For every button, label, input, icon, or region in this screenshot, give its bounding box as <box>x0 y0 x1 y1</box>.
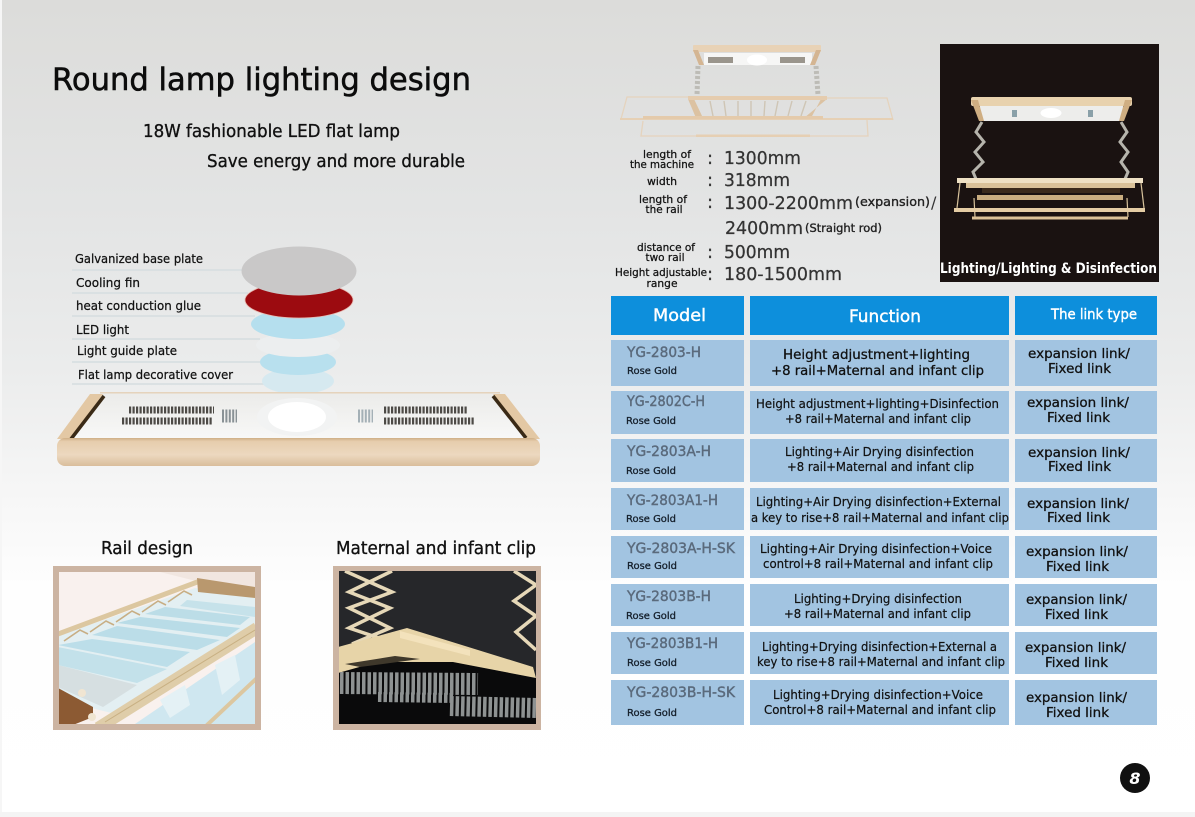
table row 2: +8 rail+Maternal and infant clip <box>785 411 971 426</box>
spec values: : <box>707 192 713 213</box>
table row 5: Rose Gold <box>627 561 677 572</box>
layer labels: Galvanized base plate <box>75 252 203 266</box>
spec values: : <box>707 242 713 263</box>
layer: cooling fin <box>245 282 353 318</box>
subtitle <box>143 122 465 172</box>
table row 7: expansion link/ <box>1025 641 1127 656</box>
table row 8: Control+8 rail+Maternal and infant clip <box>764 702 996 717</box>
table row 3: Lighting+Air Drying disinfection <box>785 444 974 459</box>
table row 7: Rose Gold <box>627 658 677 669</box>
spec values: : <box>707 148 713 169</box>
table row 2: YG-2802C-H <box>626 394 705 410</box>
table row 3: expansion link/ <box>1028 446 1131 461</box>
layer: galvanized base plate <box>242 246 356 296</box>
lamp body <box>57 392 540 466</box>
table row 5: expansion link/ <box>1026 545 1129 560</box>
table row 6 <box>611 584 1157 626</box>
table row 2: Rose Gold <box>626 416 676 427</box>
table row 1: Rose Gold <box>627 366 677 377</box>
spec values: 318mm <box>724 170 790 191</box>
spec values: 1300-2200mm <box>724 193 853 214</box>
spec labels: length of <box>639 194 687 206</box>
header labels <box>653 306 1137 327</box>
subtitle: Save energy and more durable <box>207 152 465 172</box>
table row 1 <box>611 340 1157 386</box>
table row 3 <box>611 439 1157 482</box>
page number badge <box>1120 763 1150 793</box>
table row 7: YG-2803B1-H <box>626 636 718 652</box>
photo: maternal and infant clip <box>333 566 541 730</box>
exploded lamp layers diagram <box>72 246 356 394</box>
table row 3: Rose Gold <box>626 466 676 477</box>
layer labels: Flat lamp decorative cover <box>78 368 233 382</box>
photo caption: Lighting/Lighting & Disinfection <box>940 261 1157 277</box>
layer labels: heat conduction glue <box>76 299 201 313</box>
spec values: 1300mm <box>724 148 801 169</box>
layer labels: Cooling fin <box>76 276 140 290</box>
table row 3: +8 rail+Maternal and infant clip <box>787 459 974 474</box>
table row 1: Fixed link <box>1048 362 1111 377</box>
lamp switches <box>222 410 373 422</box>
table row 6: Lighting+Drying disinfection <box>794 591 962 606</box>
table row 3: Fixed link <box>1048 460 1111 475</box>
spec list <box>615 148 937 290</box>
header labels: The link type <box>1050 307 1137 323</box>
table row 8: Fixed link <box>1046 706 1109 721</box>
table row 5 <box>611 536 1157 578</box>
subtitle: 18W fashionable LED flat lamp <box>143 122 400 142</box>
product image: expanded rack <box>620 45 893 137</box>
table row 8: YG-2803B-H-SK <box>626 685 736 701</box>
table header <box>611 296 1157 335</box>
table row 1: +8 rail+Maternal and infant clip <box>771 364 984 379</box>
spec labels: width <box>647 176 677 188</box>
spec labels: the machine <box>630 159 694 171</box>
table row 6: Fixed link <box>1045 608 1108 623</box>
layer: LED light <box>256 333 340 357</box>
table row 7: Lighting+Drying disinfection+External a <box>762 639 997 654</box>
spec labels: Height adjustable <box>615 267 707 279</box>
table row 1: expansion link/ <box>1028 347 1131 362</box>
spec labels: two rail <box>646 252 684 264</box>
spec values: 500mm <box>724 242 790 263</box>
layer labels: LED light <box>76 323 129 337</box>
table row 6: +8 rail+Maternal and infant clip <box>784 606 971 621</box>
spec values: : <box>707 264 713 285</box>
layer: decorative cover <box>262 368 334 394</box>
layer: light guide plate <box>260 349 336 375</box>
table row 4 <box>611 488 1157 530</box>
title: Round lamp lighting design <box>52 62 471 98</box>
header labels: Model <box>653 306 706 326</box>
table row 4: Lighting+Air Drying disinfection+External <box>756 494 1001 509</box>
table row 8: Rose Gold <box>627 708 677 719</box>
spec labels: distance of <box>637 242 695 254</box>
table row 8: Lighting+Drying disinfection+Voice <box>773 687 983 702</box>
spec labels: range <box>646 278 678 290</box>
photo: rail design <box>53 566 261 730</box>
table row 7: Fixed link <box>1045 656 1108 671</box>
table row 6: expansion link/ <box>1026 593 1128 608</box>
table row 4: YG-2803A1-H <box>626 493 718 509</box>
round lamp <box>257 398 337 436</box>
table row 1: Height adjustment+lighting <box>783 348 970 363</box>
layer labels: Light guide plate <box>77 344 177 358</box>
spec values: / <box>931 193 937 212</box>
page number badge: 8 <box>1129 769 1141 788</box>
clip rows <box>340 683 536 708</box>
table row 8: expansion link/ <box>1026 691 1128 706</box>
table row 4: a key to rise+8 rail+Maternal and infant clip <box>751 510 1009 525</box>
spec values <box>707 148 937 285</box>
spec values: (expansion) <box>855 195 930 209</box>
table row 2: expansion link/ <box>1027 396 1130 411</box>
table row 4: Rose Gold <box>626 514 676 525</box>
spec labels <box>615 149 707 290</box>
table row 8 <box>611 680 1157 725</box>
table row 2 <box>611 391 1157 434</box>
heading: maternal and infant clip: Maternal and infant clip <box>336 539 536 559</box>
layer labels <box>75 252 233 382</box>
table row 1: YG-2803-H <box>626 345 701 361</box>
spec values: 2400mm <box>725 218 803 239</box>
spec labels: the rail <box>646 204 682 216</box>
spec values: 180-1500mm <box>724 264 842 285</box>
table row 4: Fixed link <box>1047 511 1110 526</box>
spec labels: length of <box>643 149 691 161</box>
header labels: Function <box>849 307 921 327</box>
product photo panel: lighting & disinfection <box>940 44 1159 282</box>
table row 5: control+8 rail+Maternal and infant clip <box>763 556 993 571</box>
lamp vents <box>122 410 474 421</box>
table row 7 <box>611 632 1157 674</box>
table row 5: Lighting+Air Drying disinfection+Voice <box>760 541 992 556</box>
table row 6: Rose Gold <box>626 611 676 622</box>
table row 3: YG-2803A-H <box>626 444 711 460</box>
spec values: : <box>707 170 713 191</box>
spec values: (Straight rod) <box>805 221 882 235</box>
table row 5: YG-2803A-H-SK <box>626 541 736 557</box>
table row 6: YG-2803B-H <box>626 589 711 605</box>
table row 7: key to rise+8 rail+Maternal and infant clip <box>757 654 1005 669</box>
table row 2: Fixed link <box>1047 411 1110 426</box>
heading: rail design: Rail design <box>101 539 193 559</box>
layer: heat conduction glue <box>251 309 345 339</box>
table row 5: Fixed link <box>1046 560 1109 575</box>
table row 2: Height adjustment+lighting+Disinfection <box>756 396 999 411</box>
table row 4: expansion link/ <box>1027 497 1130 512</box>
